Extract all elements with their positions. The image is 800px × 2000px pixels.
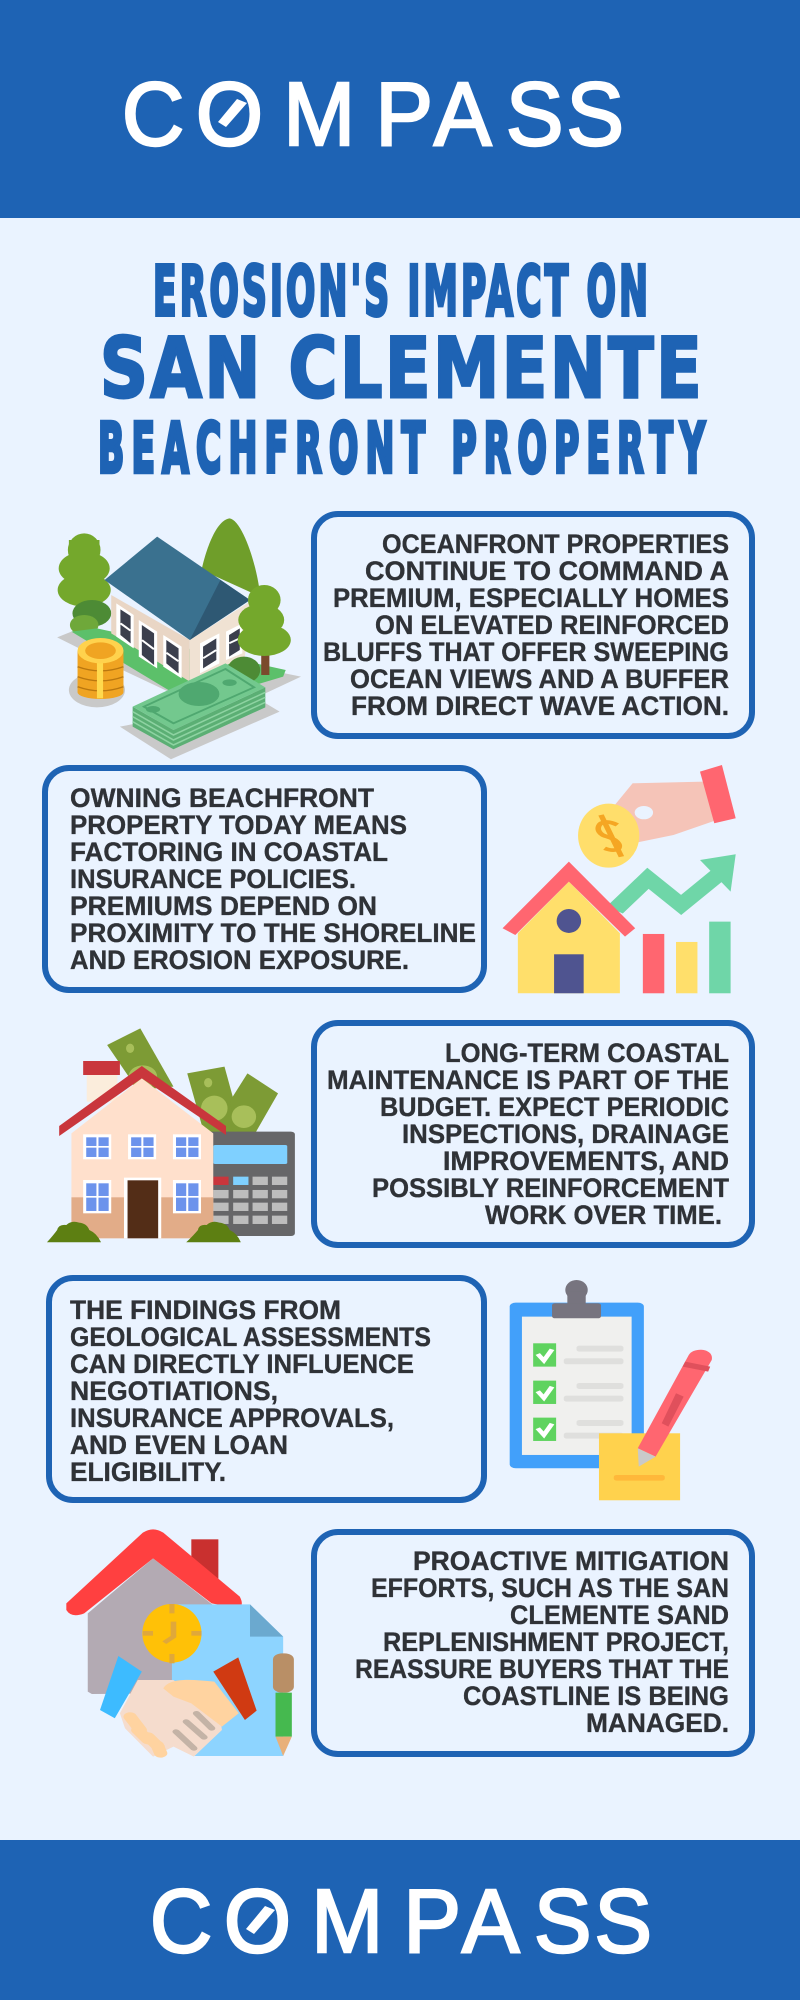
panel: oceanfront text: CONTINUE TO COMMAND A: [365, 556, 729, 586]
panel: insurance text: OWNING BEACHFRONT: [70, 783, 374, 813]
panel: insurance text: INSURANCE POLICIES.: [70, 864, 356, 894]
panel: insurance text: PROPERTY TODAY MEANS: [70, 810, 407, 840]
panel: mitigation text: CLEMENTE SAND: [510, 1600, 729, 1630]
panel: mitigation text: COASTLINE IS BEING: [463, 1681, 729, 1711]
title: SAN CLEMENTE: [100, 320, 702, 417]
panel: insurance text: PREMIUMS DEPEND ON: [70, 891, 377, 921]
footer band: [0, 1840, 800, 2000]
panel: mitigation text: PROACTIVE MITIGATION: [413, 1546, 729, 1576]
panel: insurance text: [45, 768, 484, 990]
panel: geological text: THE FINDINGS FROM: [70, 1295, 341, 1325]
panel: mitigation text: REPLENISHMENT PROJECT,: [383, 1627, 729, 1657]
panel: insurance text: FACTORING IN COASTAL: [70, 837, 388, 867]
panel: geological text: GEOLOGICAL ASSESSMENTS: [70, 1322, 431, 1352]
panel: maintenance text: WORK OVER TIME.: [485, 1200, 722, 1230]
panel: maintenance text: BUDGET. EXPECT PERIODIC: [380, 1092, 729, 1122]
panel: oceanfront text: BLUFFS THAT OFFER SWEEPING: [323, 637, 729, 667]
panel: insurance text: PROXIMITY TO THE SHORELINE: [70, 918, 476, 948]
panel: oceanfront text: FROM DIRECT WAVE ACTION.: [351, 691, 729, 721]
panel: geological text: INSURANCE APPROVALS,: [70, 1403, 394, 1433]
title: BEACHFRONT PROPERTY: [98, 407, 706, 488]
logo: Compass footer: COMPASS: [150, 1870, 652, 1971]
icon: house, coin, hand and growth chart: [503, 765, 736, 993]
logo: Compass: COMPASS: [122, 63, 624, 164]
panel: mitigation text: [314, 1532, 752, 1754]
panel: geological text: [49, 1278, 484, 1500]
title: EROSION'S IMPACT ON: [153, 250, 648, 331]
panel: maintenance text: POSSIBLY REINFORCEMENT: [372, 1173, 729, 1203]
icon: house, clock, document and handshake: [66, 1529, 294, 1757]
panel: maintenance text: IMPROVEMENTS, AND: [443, 1146, 729, 1176]
panel: geological text: AND EVEN LOAN: [70, 1430, 288, 1460]
panel: maintenance text: [314, 1023, 752, 1245]
panel: maintenance text: INSPECTIONS, DRAINAGE: [402, 1119, 729, 1149]
icon: isometric house with coins and money: [57, 518, 301, 759]
panel: oceanfront text: ON ELEVATED REINFORCED: [375, 610, 729, 640]
panel: geological text: NEGOTIATIONS,: [70, 1376, 278, 1406]
panel: geological text: ELIGIBILITY.: [70, 1457, 226, 1487]
panel: maintenance text: LONG-TERM COASTAL: [445, 1038, 729, 1068]
panel: mitigation text: REASSURE BUYERS THAT THE: [355, 1654, 729, 1684]
panel: maintenance text: MAINTENANCE IS PART OF THE: [327, 1065, 729, 1095]
panel: oceanfront text: [314, 514, 752, 736]
header band: [0, 0, 800, 218]
panel: mitigation text: MANAGED.: [586, 1708, 729, 1738]
icon: clipboard checklist with pencil: [510, 1280, 712, 1500]
title: [98, 250, 706, 488]
panel: mitigation text: EFFORTS, SUCH AS THE SAN: [371, 1573, 729, 1603]
icon: house with calculator and money: [47, 1028, 295, 1242]
panel: oceanfront text: PREMIUM, ESPECIALLY HOMES: [333, 583, 729, 613]
panel: oceanfront text: OCEAN VIEWS AND A BUFFER: [350, 664, 729, 694]
panel: oceanfront text: OCEANFRONT PROPERTIES: [382, 529, 729, 559]
panel: insurance text: AND EROSION EXPOSURE.: [70, 945, 409, 975]
panel: geological text: CAN DIRECTLY INFLUENCE: [70, 1349, 414, 1379]
